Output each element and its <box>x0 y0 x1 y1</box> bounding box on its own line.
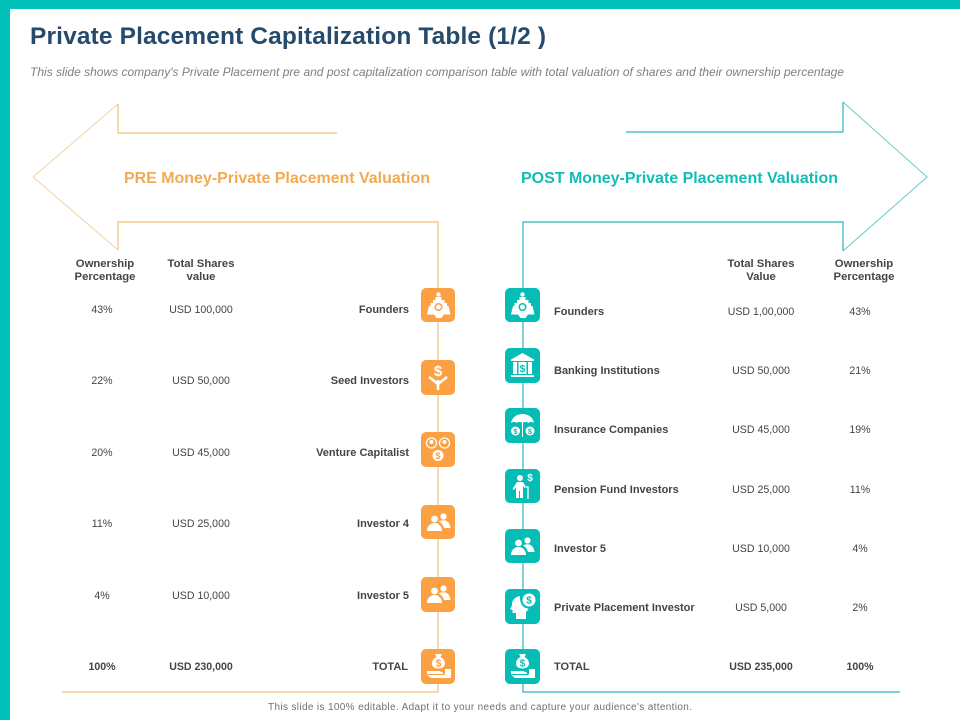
row: insurance companies <box>554 424 871 436</box>
row: investor 4: USD 25,000 <box>172 518 230 530</box>
icon: seed investors orange: $ <box>434 363 443 380</box>
icon: founders orange <box>421 288 455 322</box>
row: seed investors: USD 50,000 <box>172 375 230 387</box>
heading: post money: POST Money-Private Placement Valuation <box>521 170 838 187</box>
row: banking institutions <box>554 365 871 377</box>
row: total: TOTAL <box>372 661 408 673</box>
icon: total teal <box>505 649 540 684</box>
post-money arrow outline <box>523 102 927 692</box>
icon: pension fund investors teal <box>505 469 540 503</box>
row: total: USD 230,000 <box>169 661 233 673</box>
title: Private Placement Capitalization Table (1/2 ) <box>30 23 546 50</box>
row: founders: USD 100,000 <box>169 304 233 316</box>
row: investor 5: USD 10,000 <box>732 543 790 555</box>
row: pension fund investors <box>554 484 871 496</box>
row: founders <box>91 304 409 316</box>
row: investor 5: 4% <box>94 590 110 602</box>
row: seed investors: 22% <box>91 375 113 387</box>
row: venture capitalist: USD 45,000 <box>172 447 230 459</box>
column header: total shares value: Total Shares <box>168 258 234 270</box>
row: founders <box>554 306 871 318</box>
pre-money arrow outline <box>33 104 438 692</box>
row: private placement investor <box>554 602 868 614</box>
row: venture capitalist <box>91 447 409 459</box>
icon: seed investors orange <box>421 360 455 395</box>
icon: private placement investor teal <box>505 589 540 624</box>
row: investor 5 <box>554 543 868 555</box>
icon: banking institutions teal <box>505 348 540 383</box>
row: total <box>554 661 874 673</box>
row: total: 100% <box>88 661 116 673</box>
icon: banking institutions teal: $ <box>520 364 526 375</box>
row: private placement investor: USD 5,000 <box>735 602 787 614</box>
row: founders: USD 1,00,000 <box>728 306 794 318</box>
row: investor 4: Investor 4 <box>357 518 410 530</box>
column header: total shares value: Total Shares <box>728 258 794 270</box>
footer note: This slide is 100% editable. Adapt it to your needs and capture your audience's attention. <box>268 702 692 713</box>
row: banking institutions: Banking Institutions <box>554 365 660 377</box>
row: pension fund investors: USD 25,000 <box>732 484 790 496</box>
subtitle: This slide shows company's Private Placement pre and post capitalization comparison table with total valuation of shares and their ownership percentage <box>30 65 844 79</box>
column header: ownership percentage: Ownership <box>835 258 893 270</box>
icon: total orange <box>421 649 455 684</box>
panel: pre money table <box>75 258 410 673</box>
row: total: USD 235,000 <box>729 661 793 673</box>
row: private placement investor: Private Placement Investor <box>554 602 695 614</box>
icon: investor 5 teal <box>505 529 540 563</box>
column header: total shares value: Value <box>746 271 776 283</box>
icon: venture capitalist orange: $ <box>435 451 441 461</box>
row: investor 5: 4% <box>852 543 868 555</box>
row: investor 4: 11% <box>92 518 113 530</box>
column header: ownership percentage: Percentage <box>834 271 894 283</box>
row: investor 5: Investor 5 <box>357 590 409 602</box>
row: founders: Founders <box>554 306 604 318</box>
row: pension fund investors: Pension Fund Investors <box>554 484 679 496</box>
heading: pre money: PRE Money-Private Placement Valuation <box>124 170 430 187</box>
icon: investor 5 orange <box>421 577 455 612</box>
icon: pension fund investors teal: $ <box>527 473 533 484</box>
row: investor 4 <box>92 518 410 530</box>
row: venture capitalist: 20% <box>91 447 113 459</box>
icon: insurance companies teal: $ <box>513 427 518 436</box>
icon: insurance companies teal: $ <box>528 427 533 436</box>
row: pension fund investors: 11% <box>850 484 871 496</box>
row: banking institutions: 21% <box>849 365 871 377</box>
row: total <box>88 661 408 673</box>
row: seed investors <box>91 375 409 387</box>
row: investor 5: Investor 5 <box>554 543 606 555</box>
row: founders: Founders <box>359 304 409 316</box>
row: founders: 43% <box>849 306 871 318</box>
row: investor 5: USD 10,000 <box>172 590 230 602</box>
row: banking institutions: USD 50,000 <box>732 365 790 377</box>
icon: insurance companies teal <box>505 408 540 443</box>
row: seed investors: Seed Investors <box>331 375 409 387</box>
icon: private placement investor teal: $ <box>526 596 532 606</box>
column header: ownership percentage: Percentage <box>75 271 135 283</box>
icon: founders teal <box>505 288 540 322</box>
row: total: 100% <box>846 661 874 673</box>
panel: post money table <box>554 258 894 673</box>
row: venture capitalist: Venture Capitalist <box>316 447 409 459</box>
row: insurance companies: 19% <box>849 424 871 436</box>
row: investor 5 <box>94 590 409 602</box>
icon: venture capitalist orange <box>421 432 455 467</box>
row: founders: 43% <box>91 304 113 316</box>
row: private placement investor: 2% <box>852 602 868 614</box>
row: insurance companies: USD 45,000 <box>732 424 790 436</box>
row: total: TOTAL <box>554 661 590 673</box>
column header: total shares value: value <box>187 271 215 283</box>
column header: ownership percentage: Ownership <box>76 258 134 270</box>
row: insurance companies: Insurance Companies <box>554 424 668 436</box>
icon: investor 4 orange <box>421 505 455 539</box>
